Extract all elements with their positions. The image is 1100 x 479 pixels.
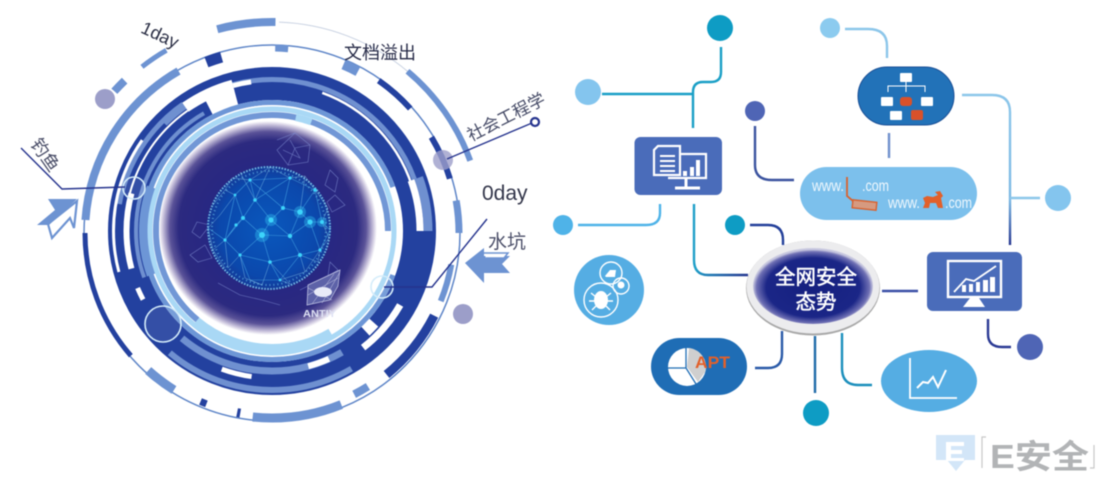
node: malicious URL pill: www. bbox=[887, 195, 920, 212]
label: phishing: 钓鱼 bbox=[26, 135, 64, 175]
connector end dots bbox=[553, 15, 1071, 426]
node: malicious URL pill bbox=[800, 167, 977, 220]
leader lines bbox=[21, 118, 539, 287]
node: network topology pill bbox=[858, 67, 954, 125]
label: 1day: 1day bbox=[138, 18, 182, 52]
node: malicious URL pill: www. bbox=[811, 178, 844, 195]
arrow: left attack arrow bbox=[37, 199, 77, 238]
node: line chart ellipse bbox=[881, 350, 977, 412]
scattered network fragments bbox=[190, 133, 345, 305]
globe network bbox=[207, 166, 331, 290]
panel: network situation diagram bbox=[553, 15, 1071, 426]
watermark: E安全: E安全 bbox=[990, 438, 1089, 475]
label: social engineering: 社会工程学 bbox=[464, 90, 548, 145]
node: malicious URL pill: .com bbox=[945, 195, 972, 212]
outer ring: thin guide lines and arcs bbox=[60, 21, 484, 445]
arrow: right attack arrow bbox=[465, 248, 510, 283]
middle rings: dark blue bands bbox=[113, 72, 431, 390]
label: document overflow: 文档溢出 bbox=[344, 43, 416, 63]
node: trend monitor box bbox=[927, 252, 1022, 311]
logo: ANTIY bbox=[303, 270, 340, 320]
hub title: 全网安全 bbox=[775, 266, 857, 289]
node: central hub bbox=[746, 240, 880, 336]
inner rings: pale blue bands bbox=[144, 102, 400, 360]
highlight bubbles bbox=[123, 177, 393, 342]
grey marker dots bbox=[95, 89, 473, 324]
connector lines bbox=[578, 29, 1040, 393]
node: document monitor box bbox=[634, 137, 722, 195]
node: APT pill: APT bbox=[695, 353, 731, 372]
hub subtitle: 态势 bbox=[796, 291, 836, 314]
node: threats circle bbox=[574, 255, 644, 325]
panel: attack rings diagram bbox=[21, 18, 548, 445]
centre purple glow bbox=[159, 121, 377, 335]
node: malicious URL pill: .com bbox=[862, 178, 889, 195]
logo: ANTIY: ANTIY bbox=[303, 308, 336, 320]
watermark: E安全 bbox=[936, 435, 1094, 475]
label: watering hole: 水坑 bbox=[488, 231, 526, 253]
node: APT pill bbox=[651, 338, 747, 395]
label: 0day: 0day bbox=[482, 182, 528, 205]
